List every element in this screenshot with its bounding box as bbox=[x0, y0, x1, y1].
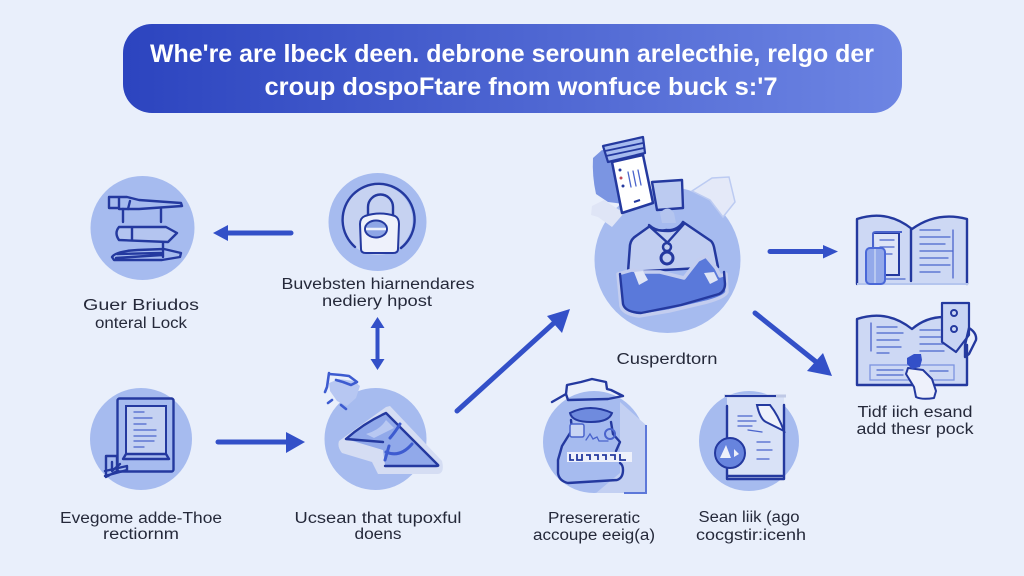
node: bottom open book with hand icon bbox=[857, 303, 976, 399]
label: backpack: Presereratic bbox=[548, 510, 640, 527]
arrow: lock to books bbox=[213, 225, 291, 241]
label: bottom book: add thesr pock bbox=[856, 421, 974, 438]
title banner bbox=[123, 24, 902, 113]
label: tent bbox=[294, 510, 462, 543]
arrow: double vertical bbox=[370, 317, 384, 370]
node: backpack icon bbox=[543, 379, 646, 493]
label: padlock: Buvebsten hiarnendares bbox=[282, 276, 475, 293]
label: document bbox=[696, 509, 806, 544]
label: tablet bbox=[60, 510, 222, 543]
label: document: Sean liik (ago bbox=[698, 509, 800, 526]
label: tent: Ucsean that tupoxful bbox=[294, 510, 462, 527]
node: top open book icon bbox=[857, 216, 968, 284]
label: person: Cusperdtorn bbox=[616, 351, 718, 368]
title banner: croup dospoFtare fnom wonfuce buck s:'7 bbox=[264, 73, 778, 101]
node: person with phone icon bbox=[591, 137, 740, 333]
label: tablet: Evegome adde-Thoe bbox=[60, 510, 222, 527]
label: books: Guer Briudos bbox=[83, 297, 199, 314]
label: bottom book: Tidf iich esand bbox=[858, 404, 972, 421]
label: books: onteral Lock bbox=[95, 315, 187, 332]
label: document: cocgstir:icenh bbox=[696, 527, 806, 544]
node: tent icon bbox=[324, 373, 443, 490]
node: books icon bbox=[90, 176, 194, 280]
label: bottom book bbox=[856, 404, 974, 438]
node: tablet document icon bbox=[90, 388, 192, 490]
label: tent: doens bbox=[354, 526, 402, 543]
arrow: tablet to tent bbox=[218, 432, 305, 453]
label: padlock: nediery hpost bbox=[322, 293, 433, 310]
arrow: diagonal up to person bbox=[457, 309, 570, 411]
label: padlock bbox=[282, 276, 475, 310]
label: books bbox=[83, 297, 199, 332]
label: backpack: accoupe eeig(a) bbox=[533, 527, 655, 544]
node: document with seal icon bbox=[699, 391, 799, 491]
label: backpack bbox=[533, 510, 655, 544]
arrow: person to bottom book bbox=[755, 313, 832, 376]
label: tablet: rectiornm bbox=[103, 526, 179, 543]
title banner: Whe're are lbeck deen. debrone serounn arelecthie, relgo der bbox=[150, 40, 874, 68]
arrow: person to top book bbox=[770, 245, 838, 258]
node: padlock icon bbox=[328, 173, 426, 271]
